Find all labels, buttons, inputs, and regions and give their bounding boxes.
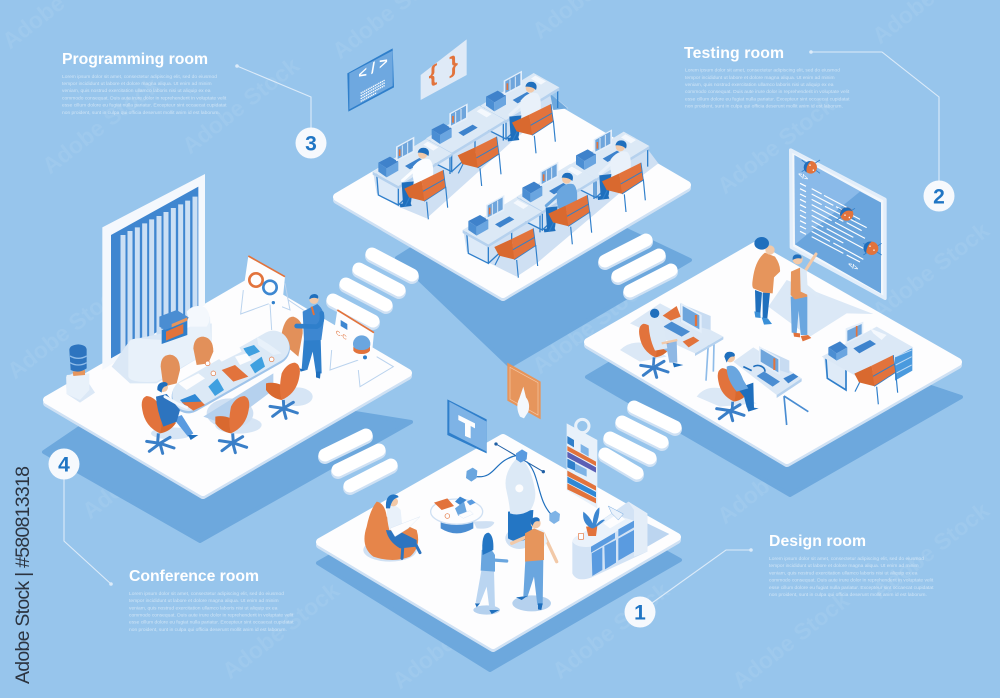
callout 4: 4 — [58, 454, 70, 476]
person: woman on bean bag — [363, 494, 420, 562]
water cooler — [66, 344, 95, 403]
text: programming room — [62, 51, 228, 116]
table — [178, 337, 282, 428]
watermarks: Adobe Stock — [387, 587, 514, 694]
body text: design room: veniam, quis nostrud exercitation ullamco laboris nisi ut aliquip ex ea — [769, 570, 918, 576]
stock id label: Adobe Stock | #580813318 — [12, 466, 34, 684]
testing room contents — [620, 150, 913, 425]
icon: curly braces panel: { } — [429, 50, 458, 89]
chairs in front of table — [142, 363, 300, 453]
chairs behind table — [161, 317, 303, 387]
steps: design to testing — [605, 407, 675, 475]
colour swatch tag — [567, 419, 597, 508]
body text: programming room: commodo consequat. Duis aute irure dolor in reprehenderit in voluptate velit — [62, 95, 227, 101]
person: man in vest — [512, 517, 557, 611]
icon: code panel — [347, 48, 394, 112]
callout 1 — [624, 548, 753, 628]
flipchart: report — [330, 310, 393, 387]
callout 3: 3 — [305, 132, 317, 156]
chair shadows — [151, 387, 313, 439]
workstation row two — [463, 129, 649, 278]
watermarks: Adobe Stock — [712, 92, 839, 199]
platform shadows — [44, 180, 961, 670]
platform: design room — [320, 438, 677, 648]
curtained window — [102, 174, 205, 370]
heading: conference room: Conference room — [129, 568, 259, 585]
platform: programming room — [337, 88, 687, 297]
watermarks: Adobe Stock — [177, 52, 304, 159]
text: design room — [769, 533, 935, 598]
person: woman in orange coat — [752, 237, 780, 325]
body text: programming room: tempor incididunt ut labore et dolore magna aliqua. Ut enim ad minim — [62, 81, 212, 87]
body text: design room: commodo consequat. Duis aute irure dolor in reprehenderit in voluptate velit — [769, 578, 934, 584]
person: woman standing — [473, 533, 507, 615]
body text: conference room: Lorem ipsum dolor sit amet, consectetur adipiscing elit, sed do eiusmod — [129, 591, 284, 597]
body text: programming room: esse cillum dolore eu fugiat nulla pariatur. Excepteur sint occaecat cupidatat — [62, 103, 227, 109]
text: conference room — [129, 568, 295, 633]
body text: testing room: tempor incididunt ut labore et dolore magna aliqua. Ut enim ad minim — [685, 75, 835, 81]
callout 2 — [809, 50, 954, 212]
body text: conference room: non proident, sunt in culpa qui officia deserunt mollit anim id est laborum. — [129, 627, 287, 633]
conference room contents — [66, 174, 393, 453]
body text: programming room: Lorem ipsum dolor sit amet, consectetur adipiscing elit, sed do eiusmod — [62, 74, 217, 80]
watermarks: Adobe Stock — [2, 277, 129, 384]
watermarks: Adobe Stock — [712, 422, 839, 529]
callout 3 — [235, 64, 326, 158]
heading: programming room: Programming room — [62, 51, 208, 68]
body text: testing room: non proident, sunt in culpa qui officia deserunt mollit anim id est laborum. — [685, 104, 843, 110]
watermarks: Adobe Stock — [37, 72, 164, 179]
body text: testing room: Lorem ipsum dolor sit amet, consectetur adipiscing elit, sed do eiusmod — [685, 68, 840, 74]
body text: conference room: veniam, quis nostrud exercitation ullamco laboris nisi ut aliquip ex ea — [129, 605, 278, 611]
person: man pointing at board — [791, 254, 817, 341]
steps: programming to testing — [605, 240, 671, 293]
person: presenter in suit — [297, 294, 324, 379]
big pen nib with bezier handles — [466, 442, 560, 549]
body text: conference room: commodo consequat. Duis aute irure dolor in reprehenderit in voluptate velit — [129, 612, 294, 618]
workstation: right with drawers — [822, 322, 913, 404]
watermarks: Adobe Stock — [867, 217, 994, 324]
icon: pen tool panel — [507, 363, 541, 419]
design room contents — [363, 363, 669, 615]
floor shadows — [768, 280, 873, 337]
body text: conference room: esse cillum dolore eu fugiat nulla pariatur. Excepteur sint occaecat cupidatat — [129, 620, 294, 626]
workstation: left — [620, 303, 723, 381]
callout 2: 2 — [933, 186, 945, 208]
flipchart: report: C-C — [336, 329, 347, 342]
body text: programming room: non proident, sunt in culpa qui officia deserunt mollit anim id est laborum. — [62, 110, 220, 116]
bug board: </> — [798, 170, 808, 183]
workstation: centre — [697, 346, 808, 425]
icon: type panel — [447, 399, 487, 453]
body text: testing room: veniam, quis nostrud exercitation ullamco laboris nisi ut aliquip ex ea — [685, 82, 834, 88]
watermarks: Adobe Stock — [867, 497, 994, 604]
bug board — [791, 150, 885, 298]
watermarks: Adobe Stock — [77, 417, 204, 524]
person: seated man — [156, 382, 198, 440]
round table — [431, 497, 494, 533]
icon: curly braces panel — [421, 39, 467, 100]
programming room contents — [347, 39, 658, 278]
reception counter with coffee machine — [112, 306, 212, 383]
text: testing room — [684, 45, 851, 110]
cabinet with plant and laptop — [572, 502, 669, 579]
body text: design room: tempor incididunt ut labore et dolore magna aliqua. Ut enim ad minim — [769, 563, 919, 569]
steps: conference to design — [325, 435, 391, 488]
body text: design room: Lorem ipsum dolor sit amet, consectetur adipiscing elit, sed do eiusmod — [769, 556, 924, 562]
callout 4 — [48, 448, 113, 586]
heading: design room: Design room — [769, 533, 866, 550]
platform: testing room — [588, 246, 958, 463]
bug board: </> — [848, 260, 858, 273]
callout 1: 1 — [634, 602, 646, 624]
heading: testing room: Testing room — [684, 45, 784, 62]
icon: code panel: </> — [358, 53, 388, 84]
workstation row one — [373, 71, 559, 219]
body text: design room: non proident, sunt in culpa qui officia deserunt mollit anim id est laborum. — [769, 592, 927, 598]
body text: conference room: tempor incididunt ut labore et dolore magna aliqua. Ut enim ad minim — [129, 598, 279, 604]
platform: conference room — [47, 281, 408, 495]
floor shadows under desks — [373, 93, 658, 277]
body text: testing room: commodo consequat. Duis aute irure dolor in reprehenderit in voluptate velit — [685, 89, 850, 95]
watermarks: Adobe Stock — [182, 407, 309, 514]
watermarks: Adobe Stock — [527, 272, 654, 379]
steps: programming to conference — [333, 254, 412, 323]
body text: programming room: veniam, quis nostrud exercitation ullamco laboris nisi ut aliquip ex ea — [62, 88, 211, 94]
watermarks: Adobe Stock — [217, 577, 344, 684]
watermarks: Adobe Stock — [727, 587, 854, 694]
watermarks: Adobe Stock — [547, 577, 674, 684]
body text: testing room: esse cillum dolore eu fugiat nulla pariatur. Excepteur sint occaecat cupidatat — [685, 96, 850, 102]
flipchart: infinity diagram — [241, 256, 313, 330]
body text: design room: esse cillum dolore eu fugiat nulla pariatur. Excepteur sint occaecat cupidatat — [769, 585, 934, 591]
icon: bugs — [802, 160, 882, 255]
